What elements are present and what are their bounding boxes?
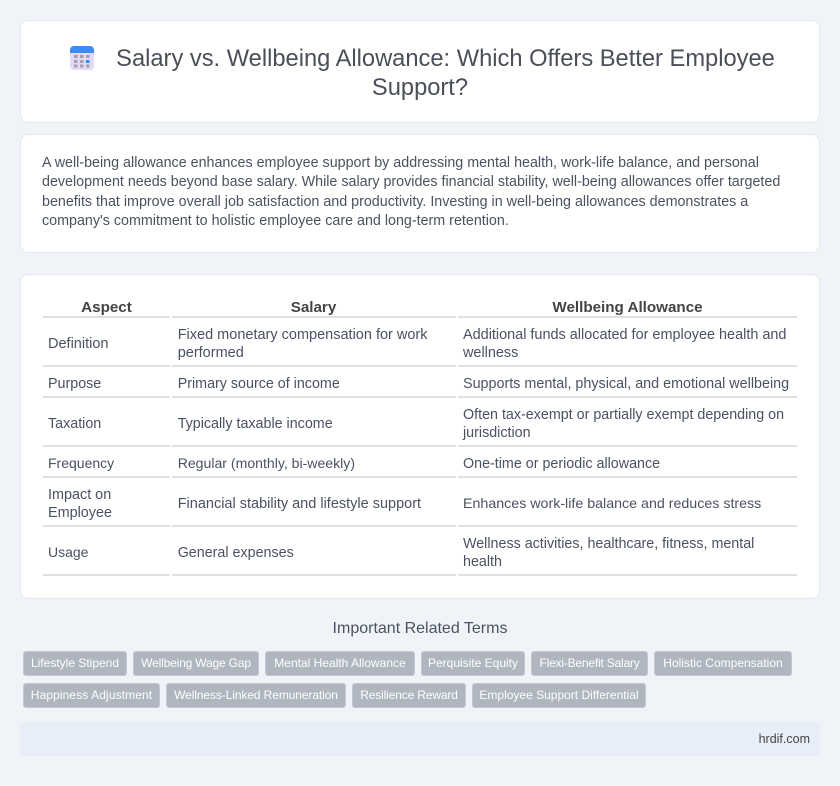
related terms heading: Important Related Terms bbox=[333, 620, 507, 637]
comparison table: jurisdiction bbox=[463, 425, 531, 441]
intro text: benefits that improve overall job satisfaction and productivity. Investing in well-being allowances demonstrates a bbox=[42, 194, 748, 210]
row: impact on employee bbox=[48, 487, 112, 521]
comparison table: health bbox=[463, 554, 502, 570]
comparison table: Financial stability and lifestyle support bbox=[178, 496, 421, 512]
tag: Flexi-Benefit Salary bbox=[539, 656, 640, 670]
tag: Wellbeing Wage Gap bbox=[141, 656, 251, 670]
tag: Perquisite Equity bbox=[428, 656, 518, 670]
tag bbox=[23, 683, 160, 708]
footer bbox=[20, 722, 820, 756]
intro text: development needs beyond base salary. While salary provides financial stability, well-being allowances offer targeted bbox=[42, 174, 780, 190]
comparison table: Typically taxable income bbox=[178, 416, 333, 432]
title: Support? bbox=[372, 75, 468, 101]
tag: Resilience Reward bbox=[360, 688, 458, 702]
comparison table: performed bbox=[178, 345, 244, 361]
table panel bbox=[20, 274, 820, 599]
intro text bbox=[42, 155, 780, 229]
tag bbox=[531, 651, 648, 676]
row: taxation: Taxation bbox=[48, 416, 101, 432]
header: salary: Salary bbox=[291, 299, 336, 316]
comparison table: Wellness activities, healthcare, fitness, mental bbox=[463, 536, 754, 552]
row: purpose: Purpose bbox=[48, 376, 101, 392]
comparison table: Regular (monthly, bi-weekly) bbox=[178, 455, 355, 471]
comparison table bbox=[43, 299, 797, 576]
intro text: A well-being allowance enhances employee support by addressing mental health, work-life balance, and personal bbox=[42, 155, 759, 171]
row: usage: Usage bbox=[48, 544, 88, 560]
comparison table: Often tax-exempt or partially exempt depending on bbox=[463, 407, 784, 423]
tag bbox=[472, 683, 646, 708]
comparison table: Enhances work-life balance and reduces stress bbox=[463, 496, 761, 512]
header: aspect: Aspect bbox=[81, 299, 132, 316]
row: impact on employee: Impact on bbox=[48, 487, 111, 503]
intro panel bbox=[20, 134, 820, 253]
tag: Happiness Adjustment bbox=[31, 688, 152, 702]
title: Salary vs. Wellbeing Allowance: Which Offers Better Employee bbox=[116, 46, 775, 72]
header panel bbox=[20, 20, 820, 123]
tag bbox=[265, 651, 415, 676]
tag: Employee Support Differential bbox=[479, 688, 639, 702]
comparison table: Additional funds allocated for employee health and bbox=[463, 327, 786, 343]
footer source: hrdif.com bbox=[759, 732, 810, 746]
comparison table: Primary source of income bbox=[178, 376, 340, 392]
header: wellbeing allowance: Wellbeing Allowance bbox=[552, 299, 703, 316]
tag bbox=[23, 651, 127, 676]
intro text: company's commitment to holistic employee care and long-term retention. bbox=[42, 213, 509, 229]
tag: Wellness-Linked Remuneration bbox=[174, 688, 338, 702]
comparison table: One-time or periodic allowance bbox=[463, 456, 660, 472]
tag bbox=[352, 683, 466, 708]
icon: calendar bbox=[70, 46, 94, 70]
tag bbox=[654, 651, 792, 676]
row: definition: Definition bbox=[48, 336, 108, 352]
related terms tags bbox=[23, 651, 792, 708]
tag bbox=[166, 683, 346, 708]
comparison table: wellness bbox=[463, 345, 518, 361]
comparison table: General expenses bbox=[178, 545, 294, 561]
comparison table: Supports mental, physical, and emotional wellbeing bbox=[463, 376, 789, 392]
title bbox=[116, 46, 775, 101]
comparison table: Fixed monetary compensation for work bbox=[178, 327, 428, 343]
tag: Mental Health Allowance bbox=[274, 656, 406, 670]
row: frequency: Frequency bbox=[48, 455, 114, 471]
row: impact on employee: Employee bbox=[48, 505, 112, 521]
tag bbox=[421, 651, 525, 676]
tag: Holistic Compensation bbox=[663, 656, 783, 670]
tag: Lifestyle Stipend bbox=[31, 656, 119, 670]
tag bbox=[133, 651, 259, 676]
